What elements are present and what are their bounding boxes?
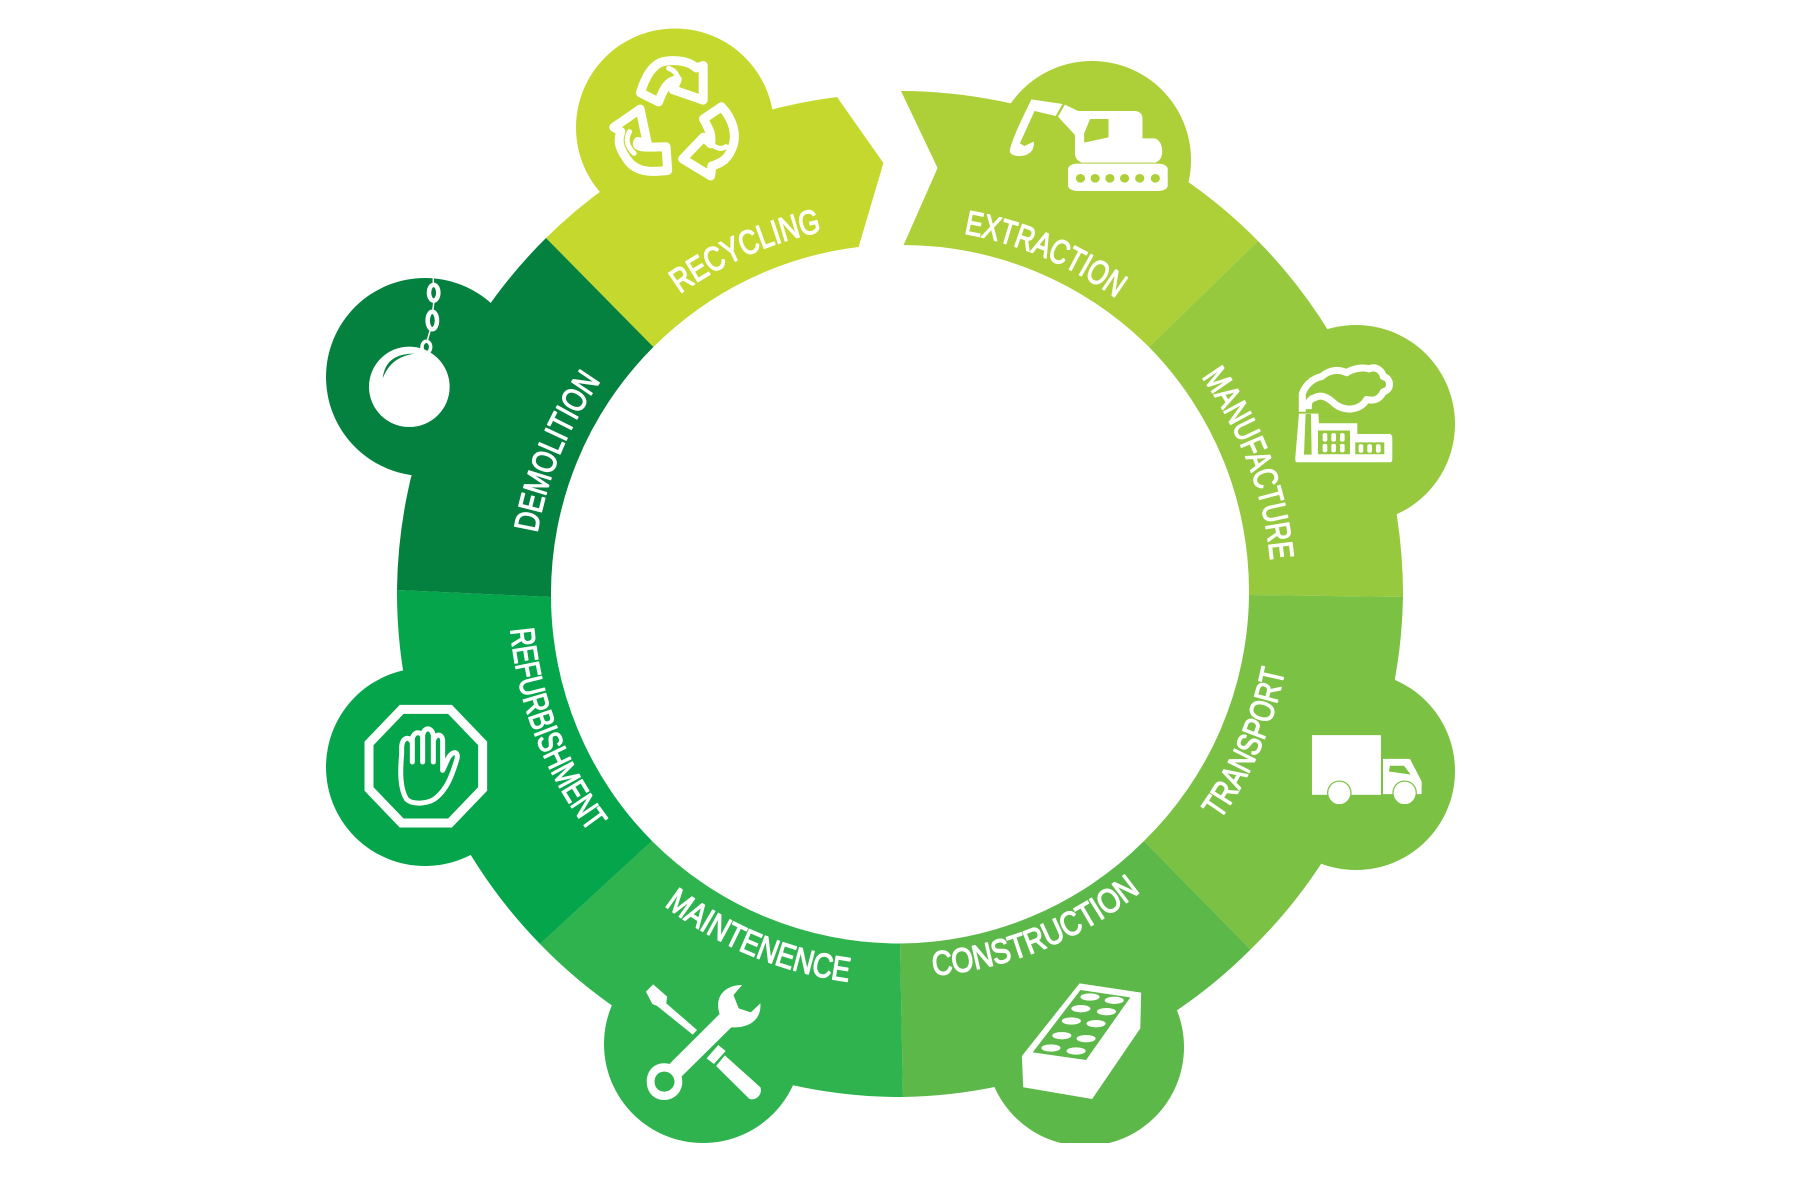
- demolition circle: [326, 278, 524, 476]
- maintenence circle: [604, 1005, 793, 1143]
- construction label: CONSTRUCTION: [932, 874, 1140, 976]
- manufacture segment: [1149, 241, 1403, 597]
- construction segment: [900, 841, 1250, 1097]
- recycling circle: [576, 28, 774, 226]
- extraction label: EXTRACTION: [965, 210, 1128, 298]
- panel: maintenence: [540, 841, 903, 1143]
- panel: refurbishment: [326, 590, 652, 944]
- maintenence label: MAINTENENCE: [665, 887, 851, 982]
- panel: extraction: [901, 61, 1258, 347]
- extraction circle: [993, 61, 1191, 259]
- manufacture circle: [1257, 325, 1455, 523]
- panel: construction: [900, 841, 1250, 1143]
- panel: transport: [1144, 595, 1455, 950]
- icon: crossed tools: [646, 984, 761, 1100]
- icon: wrecking ball: [369, 278, 450, 427]
- panel: manufacture: [1149, 241, 1455, 597]
- panel: demolition: [326, 238, 654, 597]
- icon: recycling arrows: [614, 61, 734, 176]
- manufacture label: MANUFACTURE: [1202, 364, 1294, 560]
- recycling label: RECYCLING: [668, 210, 820, 294]
- icon: brick: [1022, 983, 1141, 1099]
- icon: truck: [1312, 735, 1422, 805]
- icon: factory with smoke: [1295, 368, 1392, 462]
- recycling segment: [546, 97, 883, 347]
- refurbishment label: REFURBISHMENT: [510, 628, 608, 828]
- construction circle: [994, 1010, 1184, 1143]
- maintenence segment: [540, 841, 903, 1097]
- icon: stop sign with hand: [369, 709, 483, 823]
- extraction segment: [901, 91, 1258, 347]
- refurbishment circle: [326, 668, 524, 866]
- demolition label: DEMOLITION: [514, 369, 600, 532]
- panel: recycling: [546, 28, 884, 347]
- transport label: TRANSPORT: [1200, 666, 1284, 815]
- infographic: life cycle ring: [326, 28, 1455, 1143]
- transport circle: [1257, 672, 1455, 870]
- transport segment: [1144, 595, 1403, 950]
- icon: excavator: [1010, 99, 1168, 191]
- refurbishment segment: [397, 590, 652, 944]
- demolition segment: [397, 238, 653, 597]
